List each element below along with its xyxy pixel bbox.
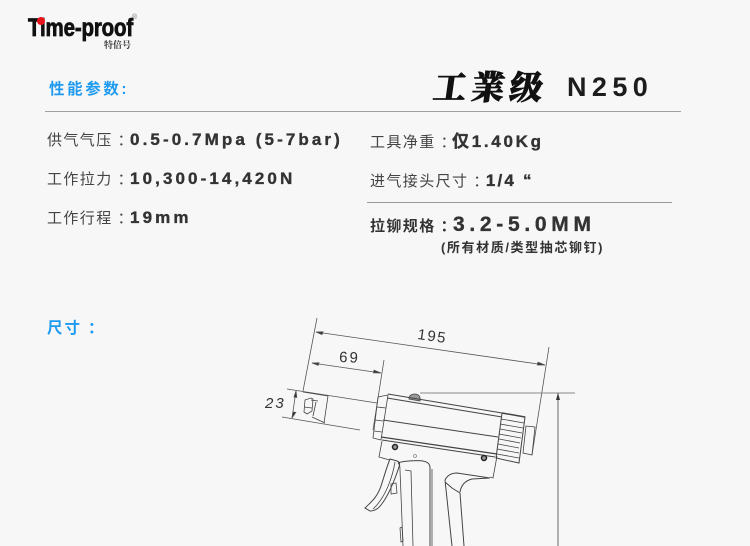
heading: performance parameters: 性能参数:	[49, 81, 129, 98]
spec: rivet range: 拉铆规格 ：3.2-5.0MM	[370, 213, 596, 236]
top knob	[409, 394, 420, 401]
front flange	[373, 395, 388, 440]
model title: 工業级	[431, 62, 551, 109]
spec note: (所有材质/类型抽芯铆钉)	[441, 240, 604, 255]
dimension 69: 69	[339, 349, 360, 367]
heading: dimensions: 尺寸 ：	[47, 320, 106, 337]
end cap	[523, 426, 535, 455]
logo: 特倍号	[104, 38, 131, 51]
divider	[45, 111, 681, 112]
divider	[367, 202, 672, 203]
nose	[303, 392, 328, 423]
model title	[431, 62, 653, 109]
screws	[392, 444, 398, 450]
knurled knob	[496, 413, 525, 463]
dimension 69	[312, 349, 384, 430]
trigger	[365, 459, 400, 511]
dimension 23	[264, 389, 377, 430]
logo: ®	[132, 14, 137, 21]
rear grip	[445, 473, 490, 546]
logo: Time-proof	[28, 14, 133, 42]
main grip	[398, 461, 430, 546]
dimension 195: 195	[416, 326, 448, 347]
dimension 23: 23	[264, 395, 286, 412]
height dimension	[420, 393, 575, 546]
spec: stroke: 工作行程 ：19mm	[47, 208, 192, 227]
main body	[382, 394, 502, 457]
spec: air pressure: 供气气压 ：0.5-0.7Mpa (5-7bar)	[47, 130, 343, 149]
spec: air inlet size: 进气接头尺寸 ：1/4 “	[370, 171, 534, 190]
lower housing	[379, 441, 497, 478]
text: N250	[567, 72, 653, 102]
rivet gun	[303, 392, 535, 546]
spec: pulling force: 工作拉力 ：10,300-14,420N	[47, 169, 295, 188]
spec: net weight: 工具净重 ：仅1.40Kg	[370, 132, 544, 151]
dimension 195	[303, 318, 549, 455]
